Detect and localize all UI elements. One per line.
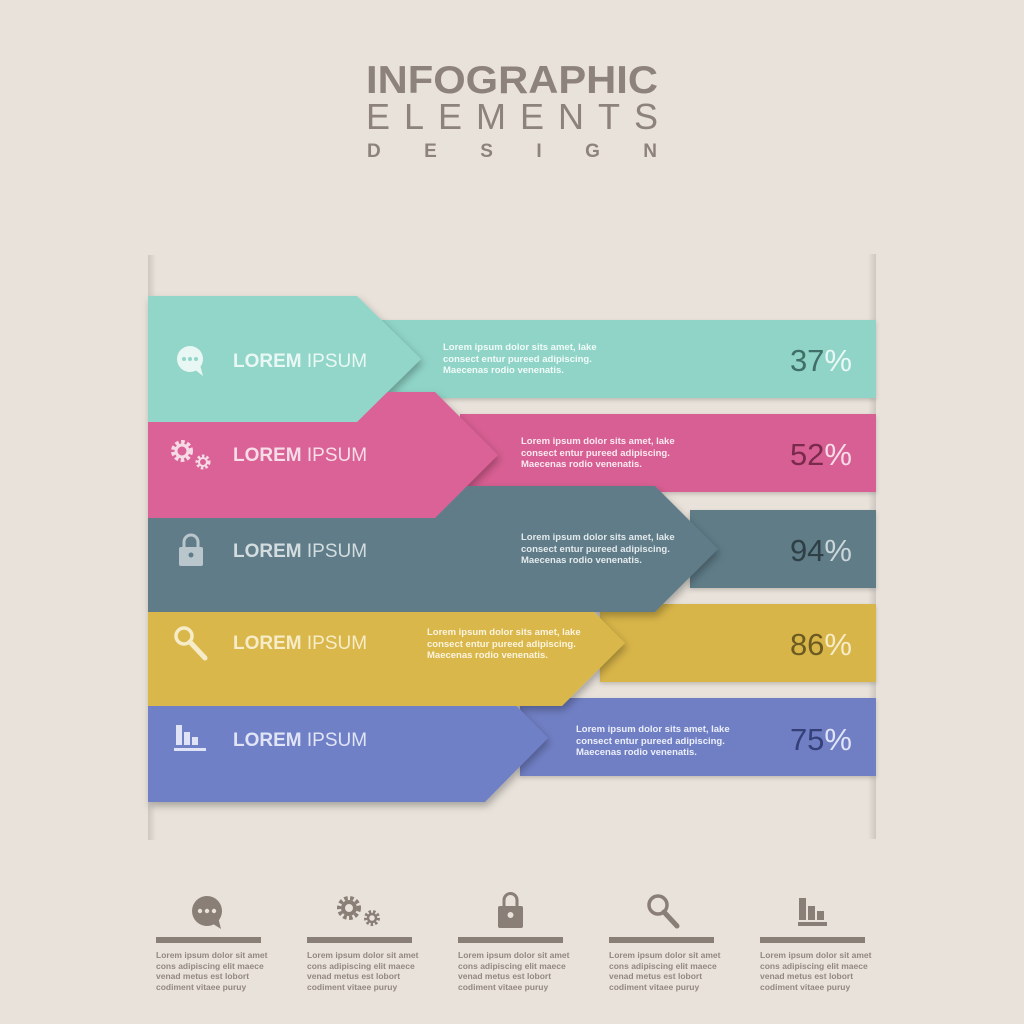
title: DESIGN (367, 141, 657, 162)
bottom text blocks: venad metus est lobort (156, 971, 249, 981)
row 1: consect entur pureed adipiscing. (443, 354, 592, 365)
bottom text blocks: cons adipiscing elit maece (307, 961, 415, 971)
bottom text blocks: codiment vitaee puruy (458, 982, 548, 992)
bar chart: bars (380, 320, 876, 776)
row 4: Maecenas rodio venenatis. (427, 650, 548, 661)
title (366, 59, 658, 162)
bottom text blocks: venad metus est lobort (760, 971, 853, 981)
row 1 (177, 342, 852, 378)
row 5: 75% (790, 722, 852, 757)
icon: gears bottom (339, 898, 378, 924)
row 3: Lorem ipsum dolor sits amet, lake (521, 532, 675, 543)
arrows (148, 296, 718, 802)
bottom text blocks (156, 950, 872, 992)
row 2: Maecenas rodio venenatis. (521, 459, 642, 470)
title: INFOGRAPHIC (366, 59, 658, 102)
row 1: Maecenas rodio venenatis. (443, 365, 564, 376)
bottom text blocks: venad metus est lobort (458, 971, 551, 981)
row 3 (179, 532, 852, 568)
row 4: LOREM IPSUM (233, 633, 367, 654)
row 2 (173, 436, 852, 472)
bottom text blocks: Lorem ipsum dolor sit amet (156, 950, 268, 960)
row 3: 94% (790, 533, 852, 568)
row 2: 52% (790, 437, 852, 472)
bottom text blocks: Lorem ipsum dolor sit amet (760, 950, 872, 960)
row 1: LOREM IPSUM (233, 351, 367, 372)
bottom text blocks: venad metus est lobort (307, 971, 400, 981)
row 5 (174, 722, 852, 758)
row 3: LOREM IPSUM (233, 541, 367, 562)
bottom text blocks: Lorem ipsum dolor sit amet (307, 950, 419, 960)
icon: bar chart (174, 725, 206, 751)
bottom text blocks: codiment vitaee puruy (307, 982, 397, 992)
icon: chat bottom (192, 896, 222, 929)
icon: gears (173, 442, 209, 468)
bottom text blocks: codiment vitaee puruy (156, 982, 246, 992)
row 5: Maecenas rodio venenatis. (576, 747, 697, 758)
icon: chat (177, 346, 203, 376)
row 1: 37% (790, 343, 852, 378)
bottom legend (156, 894, 872, 992)
bottom text blocks: codiment vitaee puruy (609, 982, 699, 992)
icon: chart bottom (798, 898, 827, 926)
side shadows (148, 255, 156, 840)
row 4: Lorem ipsum dolor sits amet, lake (427, 627, 581, 638)
icon: lock (179, 535, 203, 566)
row 3: consect entur pureed adipiscing. (521, 544, 670, 555)
bottom text blocks: Lorem ipsum dolor sit amet (458, 950, 570, 960)
bottom text blocks: cons adipiscing elit maece (156, 961, 264, 971)
row 3: Maecenas rodio venenatis. (521, 555, 642, 566)
row 2: Lorem ipsum dolor sits amet, lake (521, 436, 675, 447)
row 5: consect entur pureed adipiscing. (576, 736, 725, 747)
bottom text blocks: codiment vitaee puruy (760, 982, 850, 992)
bottom text blocks: Lorem ipsum dolor sit amet (609, 950, 721, 960)
row 4 (176, 627, 852, 662)
title: ELEMENTS (366, 96, 658, 137)
icon: lock bottom (498, 894, 523, 928)
row 5: Lorem ipsum dolor sits amet, lake (576, 724, 730, 735)
row 5: LOREM IPSUM (233, 730, 367, 751)
icon: magnifier bottom (649, 896, 677, 926)
bottom text blocks: cons adipiscing elit maece (760, 961, 868, 971)
icon: magnifier (176, 628, 205, 658)
bottom text blocks: cons adipiscing elit maece (458, 961, 566, 971)
bottom text blocks: cons adipiscing elit maece (609, 961, 717, 971)
row 2: LOREM IPSUM (233, 445, 367, 466)
row 4: consect entur pureed adipiscing. (427, 639, 576, 650)
bottom text blocks: venad metus est lobort (609, 971, 702, 981)
row 2: consect entur pureed adipiscing. (521, 448, 670, 459)
row 4: 86% (790, 627, 852, 662)
row 1: Lorem ipsum dolor sits amet, lake (443, 342, 597, 353)
